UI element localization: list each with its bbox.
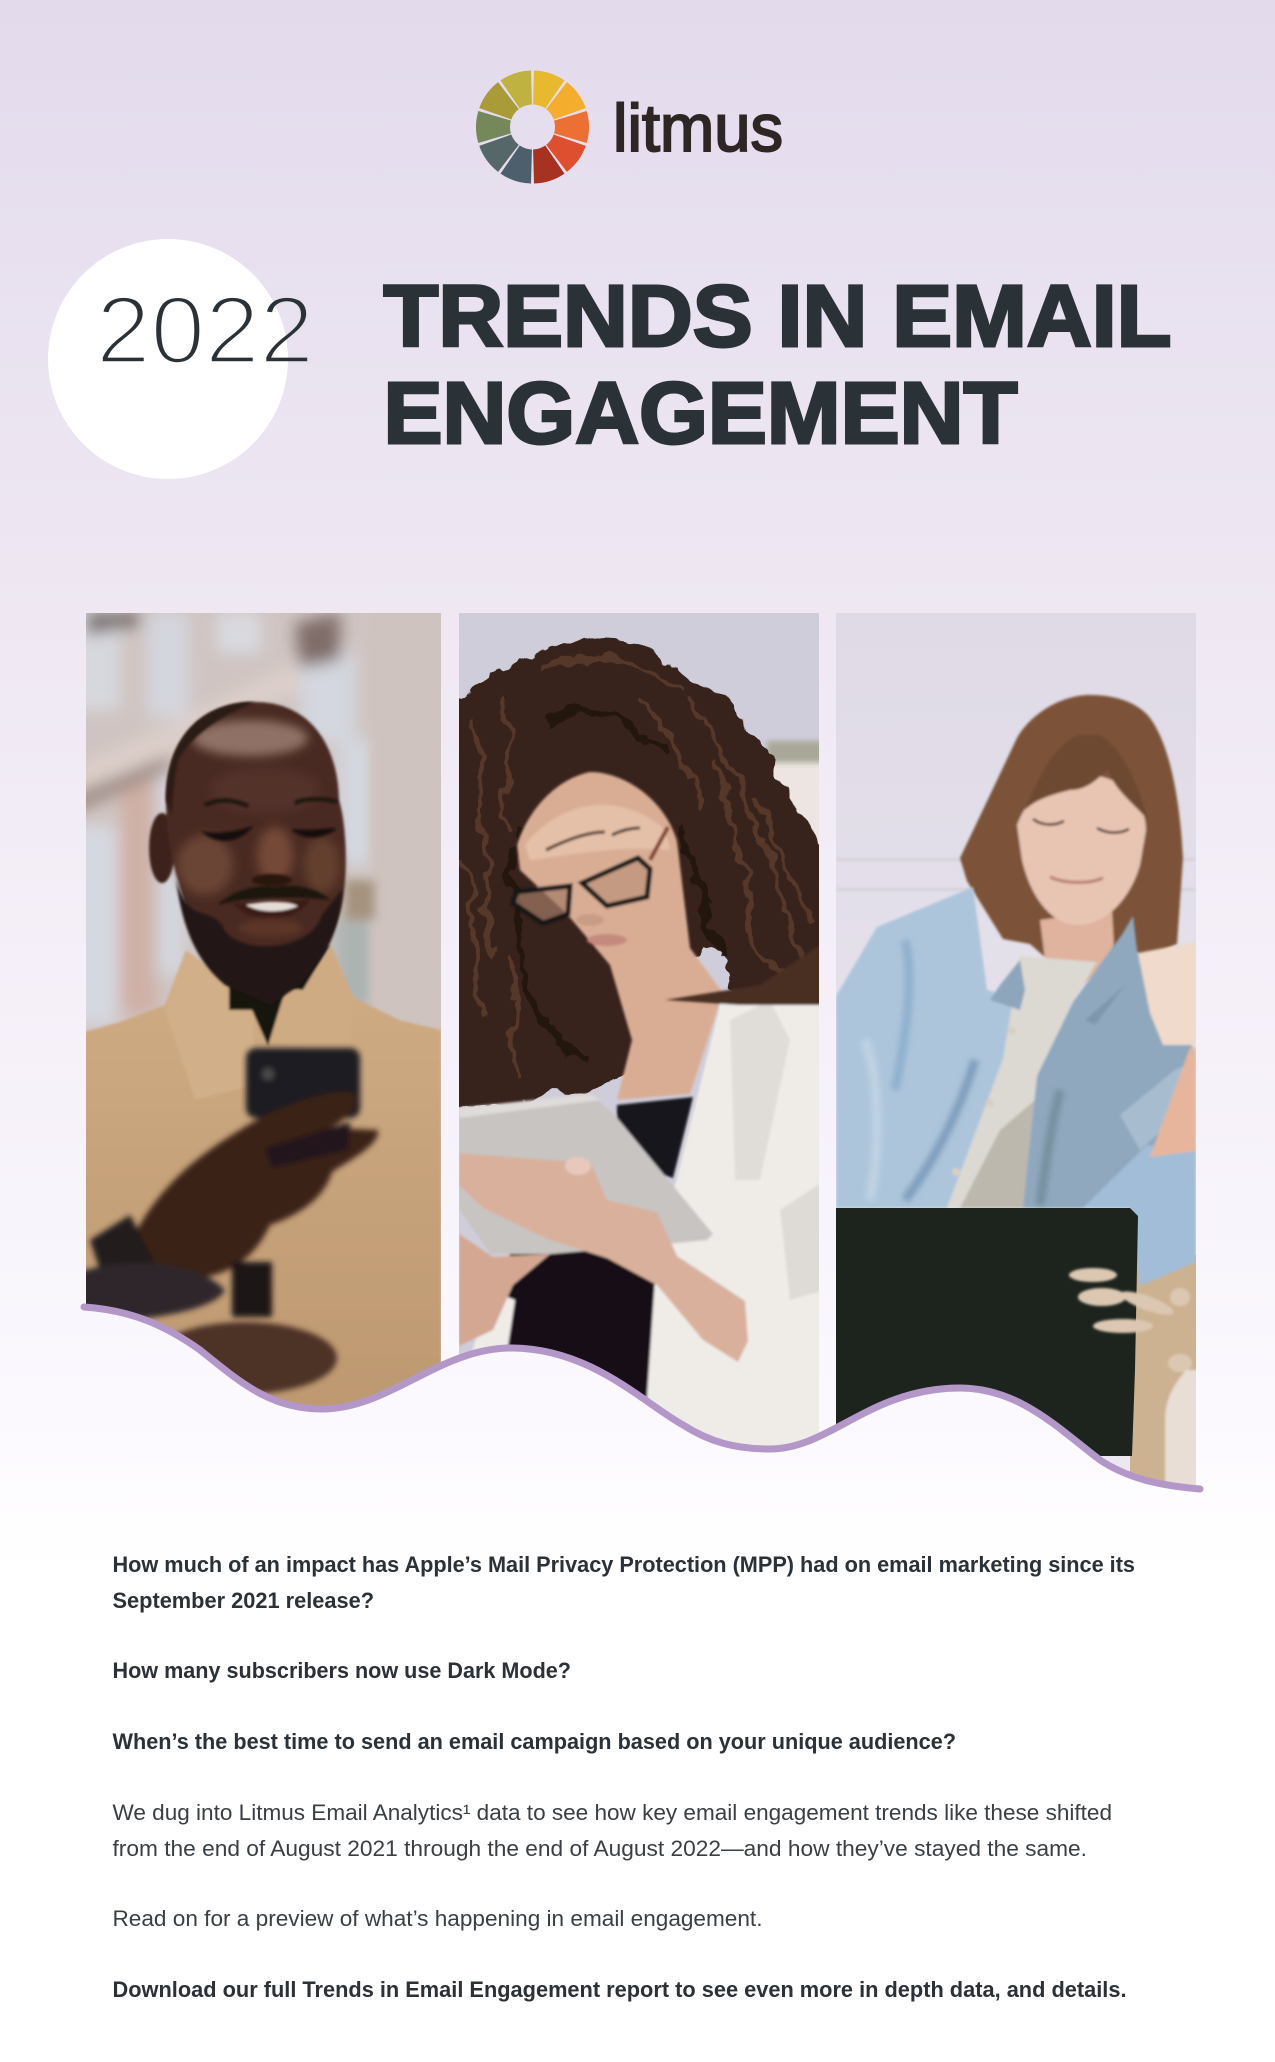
title: TRENDS IN EMAIL	[384, 268, 1172, 365]
clothes	[459, 945, 825, 1450]
photo: woman with tablet	[459, 613, 819, 1446]
question: send time: When’s the best time to send an email campaign based on your unique audience?	[112, 1729, 956, 1754]
hair	[440, 640, 835, 1106]
paragraph: analytics: from the end of August 2021 through the end of August 2022—and how they’ve stayed the same.	[112, 1836, 1087, 1861]
intro text	[112, 1552, 1135, 2002]
skin, glasses	[513, 772, 723, 1100]
question: dark mode: How many subscribers now use Dark Mode?	[112, 1658, 571, 1683]
wave line	[84, 1307, 1200, 1489]
mask below wave	[84, 1307, 1200, 1520]
call to action: Download our full Trends in Email Engagement report to see even more in depth data, and details.	[112, 1977, 1126, 2002]
dried flowers and vase	[1069, 1268, 1200, 1490]
table	[1130, 1255, 1196, 1481]
paragraph: analytics: We dug into Litmus Email Analytics¹ data to see how key email engagement trends like these shifted	[112, 1800, 1112, 1825]
year badge circle	[48, 239, 288, 479]
question: MPP: September 2021 release?	[112, 1588, 374, 1613]
denim folds	[865, 940, 1060, 1205]
photo: man with phone	[86, 613, 441, 1406]
question: MPP	[112, 1552, 1135, 1613]
paragraph: analytics	[112, 1800, 1112, 1861]
title	[384, 268, 1172, 462]
phone and hand	[80, 1048, 378, 1394]
year 2022: 2022	[96, 277, 314, 384]
question: MPP: How much of an impact has Apple’s Mail Privacy Protection (MPP) had on email marketing since its	[112, 1552, 1135, 1577]
photo: woman with laptop and mug	[836, 613, 1200, 1513]
jacket	[836, 887, 1196, 1286]
coat	[86, 944, 441, 1406]
paragraph: read on: Read on for a preview of what’s happening in email engagement.	[112, 1906, 762, 1931]
icon: colour wheel	[477, 72, 588, 182]
laptop	[836, 1208, 1138, 1456]
head	[149, 702, 346, 975]
logo: litmus	[477, 72, 783, 182]
hair and face	[960, 695, 1183, 985]
title: ENGAGEMENT	[384, 365, 1018, 462]
logo wordmark: litmus	[613, 91, 783, 166]
